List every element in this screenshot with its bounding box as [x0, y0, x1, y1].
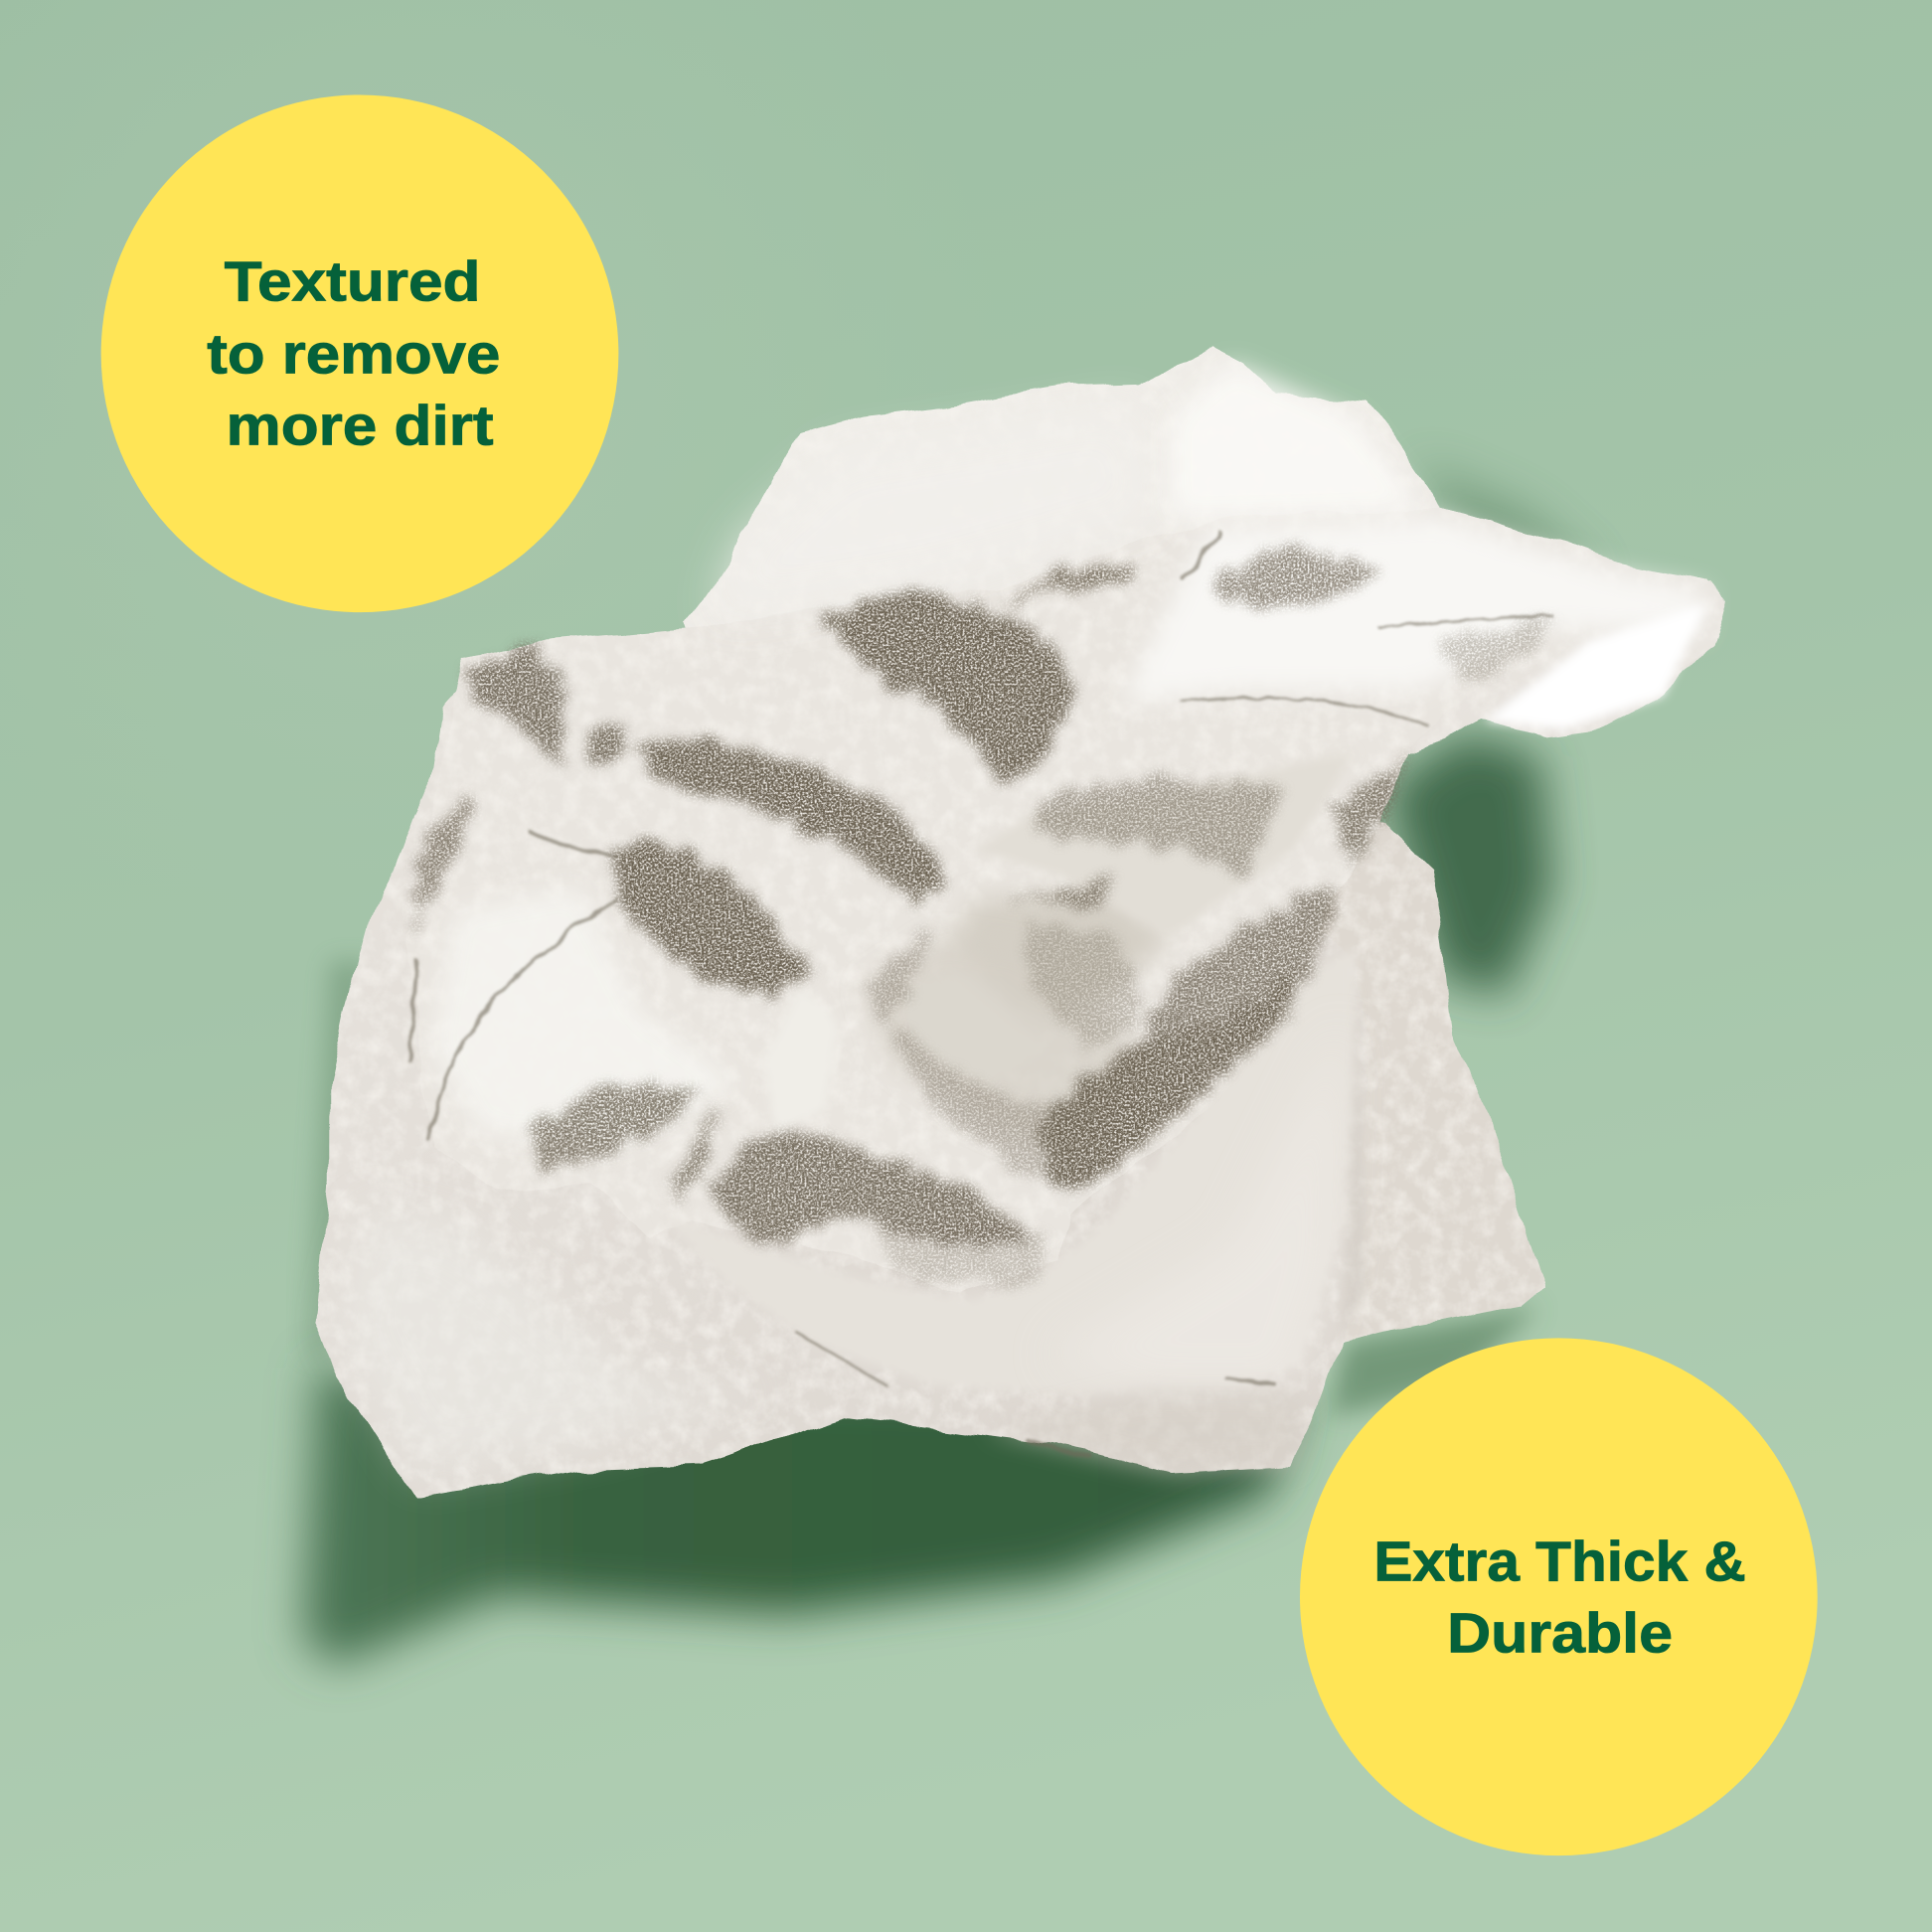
wipe back layer: top fold	[684, 348, 1726, 764]
badge: extra thick and durable: Extra Thick &	[1373, 1530, 1746, 1594]
wipe main sheet	[317, 653, 1366, 1499]
wipe front fold	[406, 508, 1725, 1294]
wipe highlights	[431, 518, 1706, 1158]
wipe shadow	[303, 462, 1602, 1666]
wipe lower fold lip	[659, 949, 1356, 1394]
badge: textured to remove more dirt: Textured	[225, 250, 481, 314]
wipe soft shading	[339, 364, 1423, 1473]
badge: textured to remove more dirt: to remove	[207, 323, 500, 387]
wipe illustration	[317, 348, 1726, 1499]
badge: textured to remove more dirt	[101, 94, 618, 612]
badge: textured to remove more dirt: more dirt	[227, 395, 494, 458]
wipe back layer: right corner	[1232, 813, 1543, 1343]
badge: extra thick and durable	[1300, 1338, 1818, 1855]
wipe crease lines	[409, 533, 1552, 1456]
badge: extra thick and durable: Durable	[1447, 1602, 1673, 1666]
wipe dirt streaks	[412, 549, 1552, 1281]
